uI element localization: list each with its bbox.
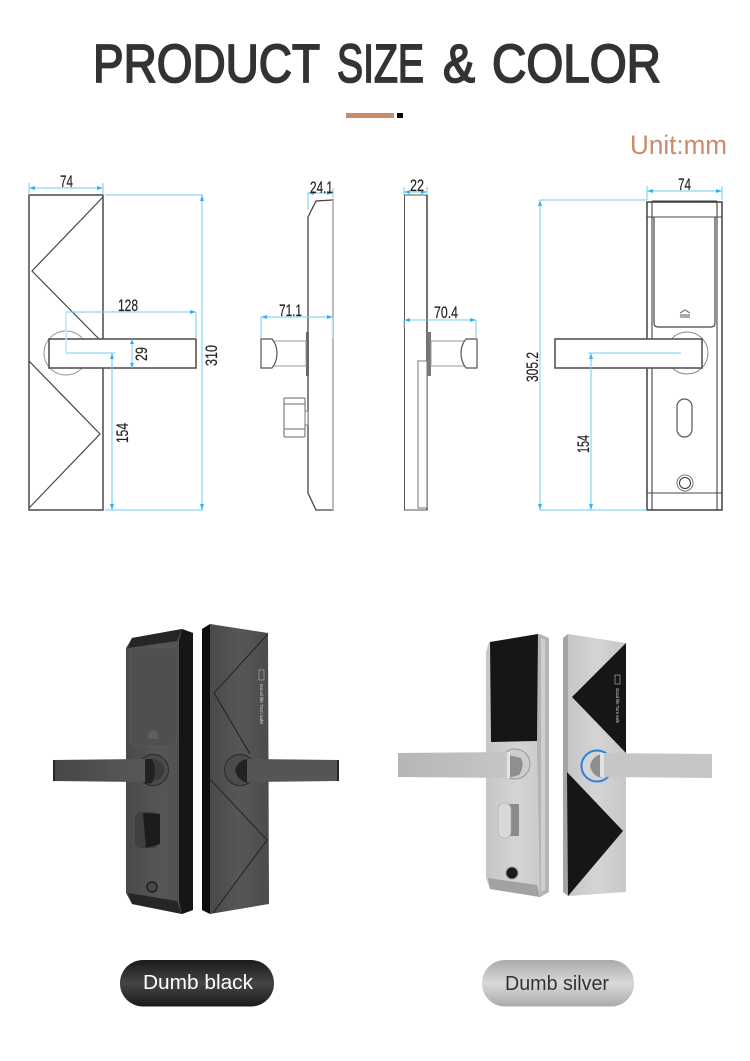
diagram: side view right with dimensions: 70.4 <box>434 303 458 322</box>
unit label: Unit:mm <box>630 130 727 160</box>
diagram: back view with dimensions: 128 <box>118 296 138 315</box>
title accent divider <box>346 113 403 118</box>
diagram: front view with dimensions <box>523 175 722 510</box>
diagram: side view left with dimensions <box>261 178 333 510</box>
diagram: side view left with dimensions: 71.1 <box>279 301 302 320</box>
title: COLOR <box>492 34 661 94</box>
diagram: back view with dimensions: 74 <box>60 172 73 191</box>
title: PRODUCT <box>93 34 320 94</box>
diagram: back view with dimensions: 310 <box>202 345 221 366</box>
diagram: front view with dimensions: 74 <box>678 175 691 194</box>
product photo: silver lock back <box>563 634 712 896</box>
diagram: side view right with dimensions <box>404 176 477 510</box>
product photo: black lock back: Good life Turn safe <box>259 684 264 725</box>
product photo: silver lock back: Good life Turn safe <box>615 688 620 723</box>
diagram: side view left with dimensions: 24.1 <box>310 178 333 197</box>
diagram: side view right with dimensions: 22 <box>410 176 424 195</box>
product photo: silver lock front <box>398 634 549 897</box>
product photo: black lock front <box>53 629 193 914</box>
diagram: back view with dimensions <box>29 172 221 510</box>
color pill: Dumb black: Dumb black <box>143 972 254 994</box>
color pill: Dumb silver <box>482 960 634 1006</box>
title <box>93 34 661 94</box>
title: & <box>443 34 475 94</box>
diagram: front view with dimensions: 305.2 <box>523 352 542 382</box>
diagram: back view with dimensions: 154 <box>113 423 132 443</box>
color pill: Dumb silver: Dumb silver <box>505 973 609 995</box>
title: SIZE <box>337 34 424 94</box>
diagram: front view with dimensions: 154 <box>574 435 593 453</box>
product photo: black lock back <box>202 624 339 914</box>
color pill: Dumb black <box>120 960 274 1006</box>
diagram: back view with dimensions: 29 <box>132 347 151 361</box>
